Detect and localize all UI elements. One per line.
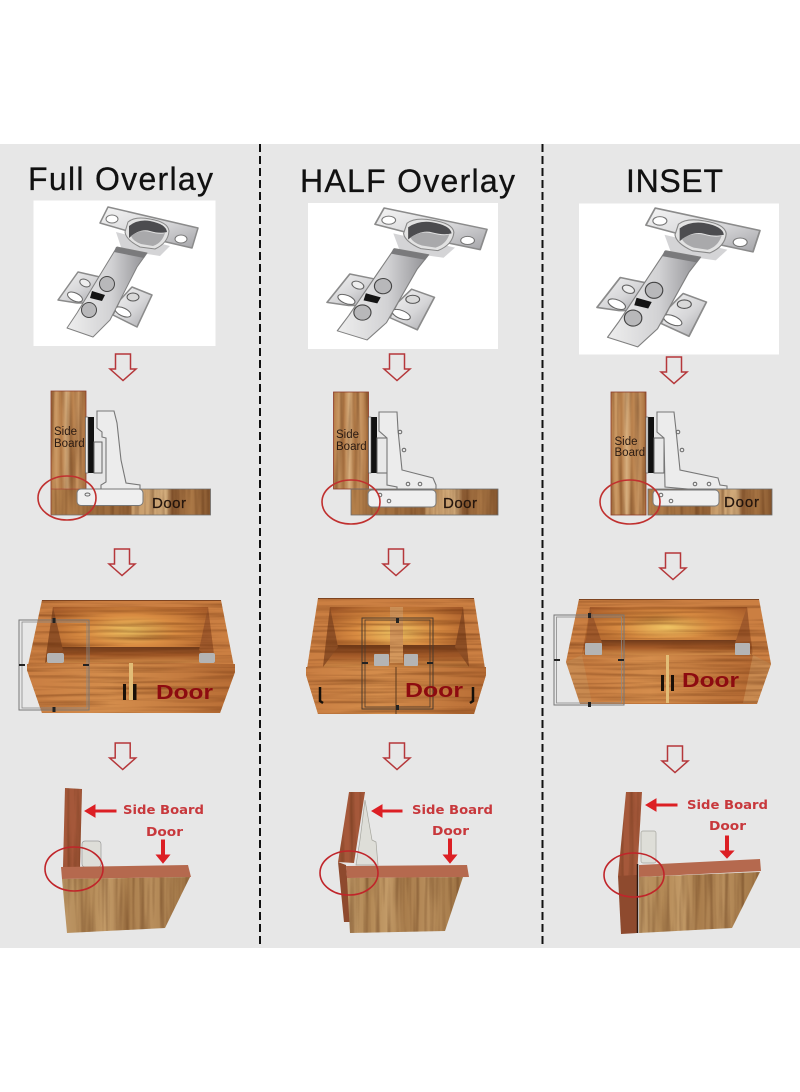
column: INSET: [554, 163, 779, 934]
diagram: corner view: Side Board: [123, 802, 204, 817]
diagram: side view: Door: [152, 495, 186, 512]
title: Full Overlay: Full Overlay: [28, 161, 213, 197]
diagram: side view: Door: [443, 495, 477, 512]
photo: hinge on white: [579, 204, 779, 354]
diagram: corner view: [45, 788, 204, 933]
diagram: corner view: Side Board: [687, 797, 768, 812]
arrow: [110, 354, 136, 380]
diagram: side view: Board: [54, 438, 85, 450]
column: HALF Overlay: [300, 163, 515, 933]
diagram: cabinet: Door: [405, 680, 463, 702]
column: Full Overlay: [19, 161, 235, 933]
diagram: side view: Board: [336, 441, 367, 453]
panel: grey background: [0, 144, 800, 948]
arrow: [662, 746, 688, 772]
diagram: cabinet: [554, 599, 771, 707]
diagram: side view: Door: [724, 494, 759, 511]
arrow: [660, 553, 686, 580]
diagram: corner view: Door: [146, 824, 184, 839]
diagram: side view: Side: [336, 429, 359, 441]
arrow: [383, 549, 409, 576]
divider dashes: [260, 144, 542, 948]
diagram: side view: [322, 392, 498, 524]
arrow: [109, 549, 135, 576]
arrow: [661, 357, 687, 384]
diagram: cabinet: Door: [682, 670, 739, 692]
diagram: cabinet: Door: [156, 682, 213, 704]
arrow: [384, 354, 410, 380]
diagram: corner view: Door: [709, 818, 747, 833]
title: HALF Overlay: HALF Overlay: [300, 163, 515, 199]
diagram: corner view: Door: [432, 823, 470, 838]
diagram: cabinet: [306, 598, 486, 714]
diagram: corner view: Side Board: [412, 802, 493, 817]
photo: hinge on white: [308, 203, 498, 349]
diagram: corner view: [604, 792, 768, 934]
arrow: [384, 743, 410, 770]
diagram: cabinet: [19, 600, 235, 713]
arrow: [110, 743, 136, 770]
diagram: side view: [600, 392, 772, 524]
diagram: side view: [38, 391, 210, 520]
diagram: side view: Board: [614, 447, 645, 459]
diagram: corner view: [320, 792, 493, 933]
title: INSET: INSET: [626, 163, 723, 199]
diagram: side view: Side: [54, 426, 77, 438]
photo: hinge on white: [34, 200, 216, 346]
diagram: side view: Side: [614, 436, 638, 448]
